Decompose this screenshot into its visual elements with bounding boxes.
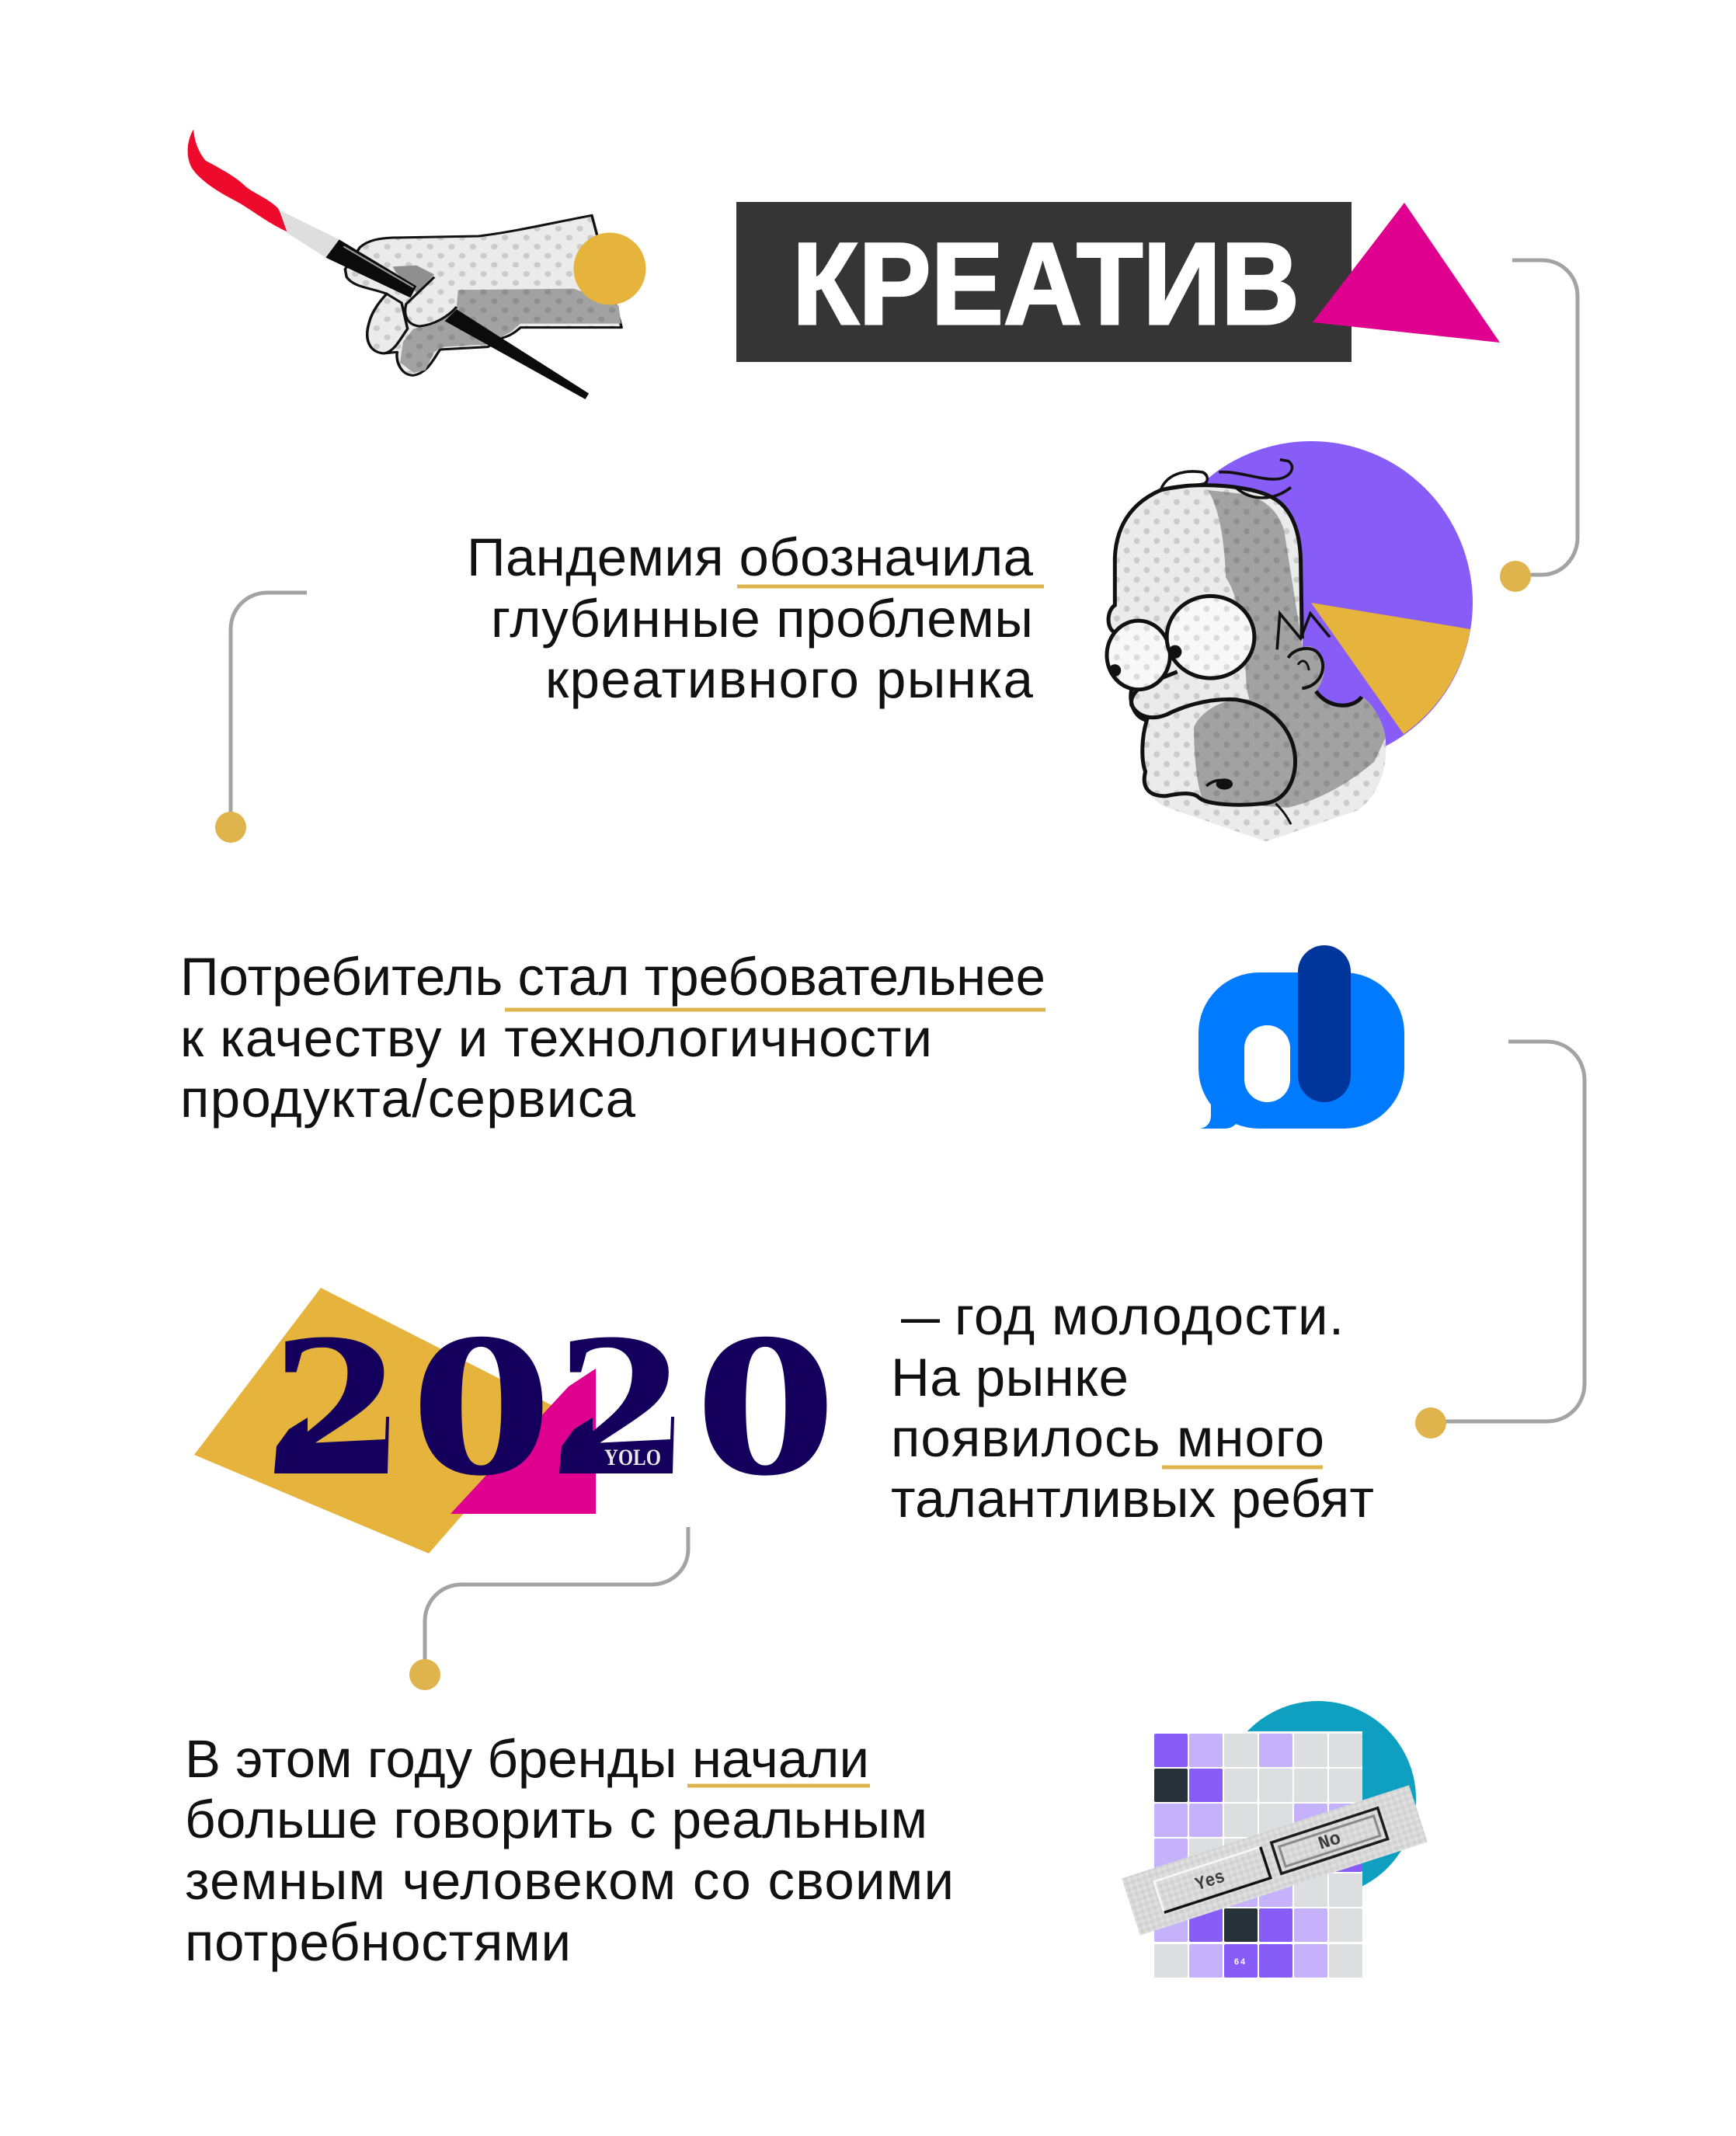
bubble body (1199, 972, 1404, 1129)
graphic: heatmap with dialog (1122, 1701, 1428, 1978)
title text: КРЕАТИВ (792, 218, 1299, 349)
Yes button (1154, 1847, 1271, 1912)
year digits: 2 (553, 1290, 683, 1519)
YOLO label: YOLO (604, 1445, 661, 1470)
hand shaded area (400, 289, 621, 373)
graphic: 2020 (194, 1288, 838, 1553)
text block: pandemic (467, 527, 1044, 709)
grey finger behind brush (393, 266, 434, 293)
text block: brands: В этом году бренды начали (185, 1729, 869, 1789)
icon: hand holding paintbrush (188, 130, 621, 399)
text block: consumer: к качеству и технологичности (180, 1008, 932, 1068)
right eye (1167, 596, 1254, 678)
text block: pandemic: Пандемия обозначила (467, 527, 1034, 587)
teal circle (1220, 1701, 1416, 1897)
gold diamond (194, 1288, 556, 1553)
text block: consumer (180, 947, 1045, 1129)
bubble tail (1200, 1103, 1243, 1129)
head shading (1194, 490, 1385, 808)
grid background (1153, 1731, 1362, 1972)
text block: youth: — (901, 1286, 940, 1346)
thumb outline (405, 277, 457, 326)
No button (1272, 1808, 1388, 1873)
left eye (1107, 621, 1170, 690)
text block: consumer: Потребитель стал требовательнее (180, 947, 1045, 1007)
thumb (405, 270, 458, 326)
text block: youth: появилось много (891, 1408, 1324, 1468)
connector 3 (1415, 1042, 1585, 1438)
No button: No (1316, 1828, 1344, 1856)
text block: youth (891, 1286, 1374, 1529)
text block: youth: талантливых ребят (891, 1469, 1374, 1529)
text block: brands: потребностями (185, 1912, 571, 1972)
Yes button: Yes (1193, 1867, 1228, 1896)
brush red paint (188, 130, 287, 231)
text block: youth: На рынке (891, 1348, 1129, 1407)
year digits: 0 (694, 1290, 838, 1519)
connector 1 (1500, 260, 1578, 592)
feet of the digit 2 (274, 1417, 674, 1473)
cell number: 64 (1234, 1957, 1247, 1967)
text block: youth: год молодости. (955, 1286, 1344, 1346)
head outline (1108, 485, 1362, 805)
handle highlight (343, 246, 413, 287)
Yes/No dialog strip (1122, 1785, 1428, 1936)
text block: brands (185, 1729, 954, 1972)
text block: brands: земным человеком со своими (185, 1851, 954, 1911)
title (736, 202, 1352, 362)
text block: pandemic: креативного рынка (545, 649, 1034, 709)
connector 2 (215, 593, 307, 843)
title box (736, 202, 1352, 362)
head silhouette (1108, 485, 1386, 841)
year digits: 2 (269, 1290, 398, 1519)
brush handle upper (325, 239, 416, 297)
brush ferrule (281, 211, 339, 258)
pie chart with Homer (1107, 441, 1473, 841)
text block: brands: больше говорить с реальным (185, 1790, 927, 1849)
lower finger (367, 294, 408, 353)
year digits: 0 (409, 1290, 554, 1519)
icon: chat bubble (1199, 945, 1404, 1129)
white pill (1244, 1025, 1290, 1102)
text block: pandemic: глубинные проблемы (491, 589, 1033, 649)
pink triangle (451, 1369, 596, 1514)
dark pill (1298, 945, 1351, 1102)
pie chart (1150, 441, 1473, 764)
ear (1288, 649, 1323, 688)
brush handle lower (445, 309, 589, 399)
nose (1206, 781, 1231, 786)
icon: pink triangle (1313, 203, 1500, 343)
pupils (1108, 664, 1121, 677)
connector 4 (409, 1527, 688, 1690)
hand shape (345, 215, 621, 375)
heatmap grid (1154, 1734, 1362, 1978)
hair (1160, 460, 1330, 649)
gold circle (573, 233, 646, 304)
year digits (269, 1290, 838, 1519)
Homer head illustration (1107, 460, 1386, 841)
text block: consumer: продукта/сервиса (180, 1069, 636, 1129)
